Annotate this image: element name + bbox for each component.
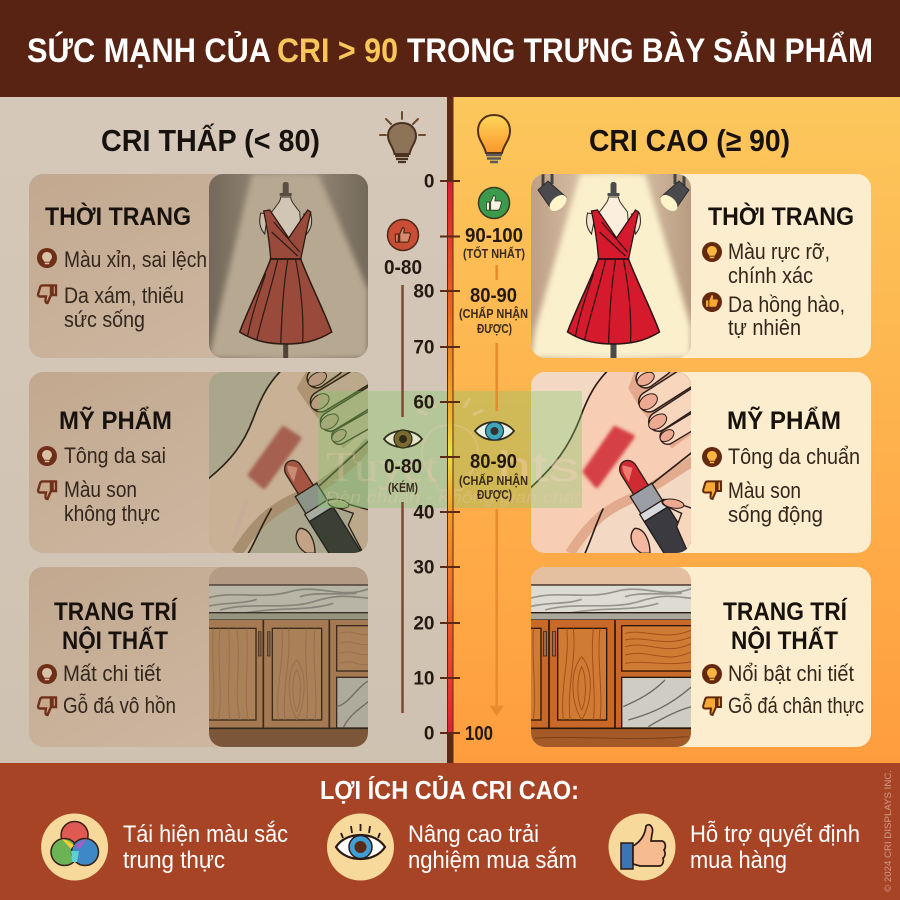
high CRI legend: viewing [459,422,528,714]
icon: thumbs down [703,697,721,715]
heading: MỸ PHẨM [727,405,841,435]
icon: bulb bullet [37,664,57,684]
scale numbers: 70 [413,338,434,358]
scale numbers: 10 [413,668,434,690]
arrow down [492,509,501,714]
icon: bulb bullet [37,446,57,466]
icon: thumbs down [38,481,56,499]
text: nghiệm mua sắm [408,847,577,874]
panel: cosmetics high CRI [531,372,871,553]
scale numbers: 20 [413,614,434,634]
text: trung thực [123,847,225,874]
high CRI legend: rating [459,188,528,411]
text: không thực [64,501,160,526]
scale numbers [413,172,434,744]
low CRI legend: viewing: 0-80 [384,456,422,478]
low CRI legend: viewing [384,430,422,713]
text: Màu son [64,477,137,502]
text: chính xác [728,263,813,288]
label: 100: 100 [465,723,493,745]
panel: fashion high CRI [531,174,871,358]
icon: dim bulb [380,112,425,162]
text: Hỗ trợ quyết định [690,821,860,848]
icon: spotlight right [660,174,690,211]
panel: fashion low CRI [29,174,368,358]
heading: TRANG TRÍ [54,597,178,626]
heading: MỸ PHẨM [59,405,172,435]
high CRI legend: viewing: ĐƯỢC) [477,487,512,502]
heading: THỜI TRANG [708,201,854,231]
scale numbers: 30 [413,558,434,578]
text: mua hàng [690,847,787,874]
text: Tái hiện màu sắc [123,821,288,848]
icon: bulb bullet [702,447,722,467]
text: Màu son [728,478,801,503]
icon: bulb bullet [37,248,57,268]
image: dull dress [209,174,368,358]
text: tự nhiên [728,315,801,340]
heading: NỘI THẤT [62,625,168,655]
icon: thumbs down [38,285,56,303]
image: vivid lipstick on wrist [531,372,691,553]
heading: NỘI THẤT [731,625,838,655]
icon: bulb bullet [702,664,722,684]
panel: interior high CRI [528,565,871,748]
text: Da hồng hào, [728,292,845,317]
low CRI legend: rating: 0-80 [384,257,422,279]
heading: THỜI TRANG [45,201,191,231]
footer heading: LỢI ÍCH CỦA CRI CAO: [320,774,579,805]
icon: colour circles [41,814,108,880]
title [27,32,873,70]
panel: interior low CRI [29,565,372,748]
image: dull lipstick on wrist [209,372,368,553]
watermark: Đèn chuẩn - Không gian chất [325,488,581,507]
watermark: Tuyet [326,445,438,491]
scale numbers: 60 [413,392,434,414]
text: Mất chi tiết [63,661,161,686]
image: dull cabinet [205,565,372,748]
watermark [318,391,582,508]
text: Gỗ đá chân thực [728,693,864,718]
heading: low CRI: CRI THẤP (< 80) [101,123,320,158]
high CRI legend: viewing: (CHẤP NHẬN [459,473,528,488]
icon: thumbs up [702,292,722,312]
icon: eye [327,814,394,880]
panel: right high-CRI background [451,97,900,763]
high CRI legend: rating: (TỐT NHẤT) [463,246,525,261]
text: Gỗ đá vô hồn [63,693,176,718]
high CRI legend: rating: 90-100 [465,225,523,247]
icon: thumbs down [38,697,56,715]
text: Tông da chuẩn [728,444,860,469]
high CRI legend: viewing: 80-90 [470,451,517,473]
heading: high CRI: CRI CAO (≥ 90) [589,123,790,158]
title: CRI > 90 [277,32,398,70]
low CRI legend: rating [384,220,422,417]
title: SỨC MẠNH CỦA [27,32,271,70]
heading: TRANG TRÍ [723,597,848,626]
text: Màu xỉn, sai lệch [64,247,207,272]
panel: left low-CRI background [0,97,449,763]
panel: cosmetics low CRI [29,372,368,553]
image: vivid dress [531,174,691,358]
footer band [0,763,900,900]
high CRI legend: rating: 80-90 [470,285,517,307]
text: Nổi bật chi tiết [728,661,854,686]
icon: spotlight left [537,174,567,211]
text: Màu rực rỡ, [728,239,830,264]
icon: thumbs down [703,481,721,499]
text: Nâng cao trải [408,821,539,848]
header band [0,0,900,97]
text: sức sống [64,307,145,332]
scale numbers: 0 [424,172,434,192]
scale numbers: 0 [424,724,434,744]
low CRI legend: viewing: (KÉM) [388,480,418,495]
copyright note: © 2024 CRI DISPLAYS INC. [883,770,894,892]
scale numbers: 40 [413,502,434,524]
scale numbers: 80 [413,282,434,302]
text: Da xám, thiếu [64,283,184,308]
icon: thumbs up [608,814,676,880]
icon: bright bulb [478,115,510,162]
text: sống động [728,502,823,527]
central CRI scale [413,97,493,763]
image: vivid cabinet [528,565,693,748]
watermark: hts [497,443,579,490]
high CRI legend: rating: (CHẤP NHẬN [459,306,528,321]
text: Tông da sai [64,443,166,468]
icon: bulb bullet [702,242,722,262]
high CRI legend: rating: ĐƯỢC) [477,321,512,336]
